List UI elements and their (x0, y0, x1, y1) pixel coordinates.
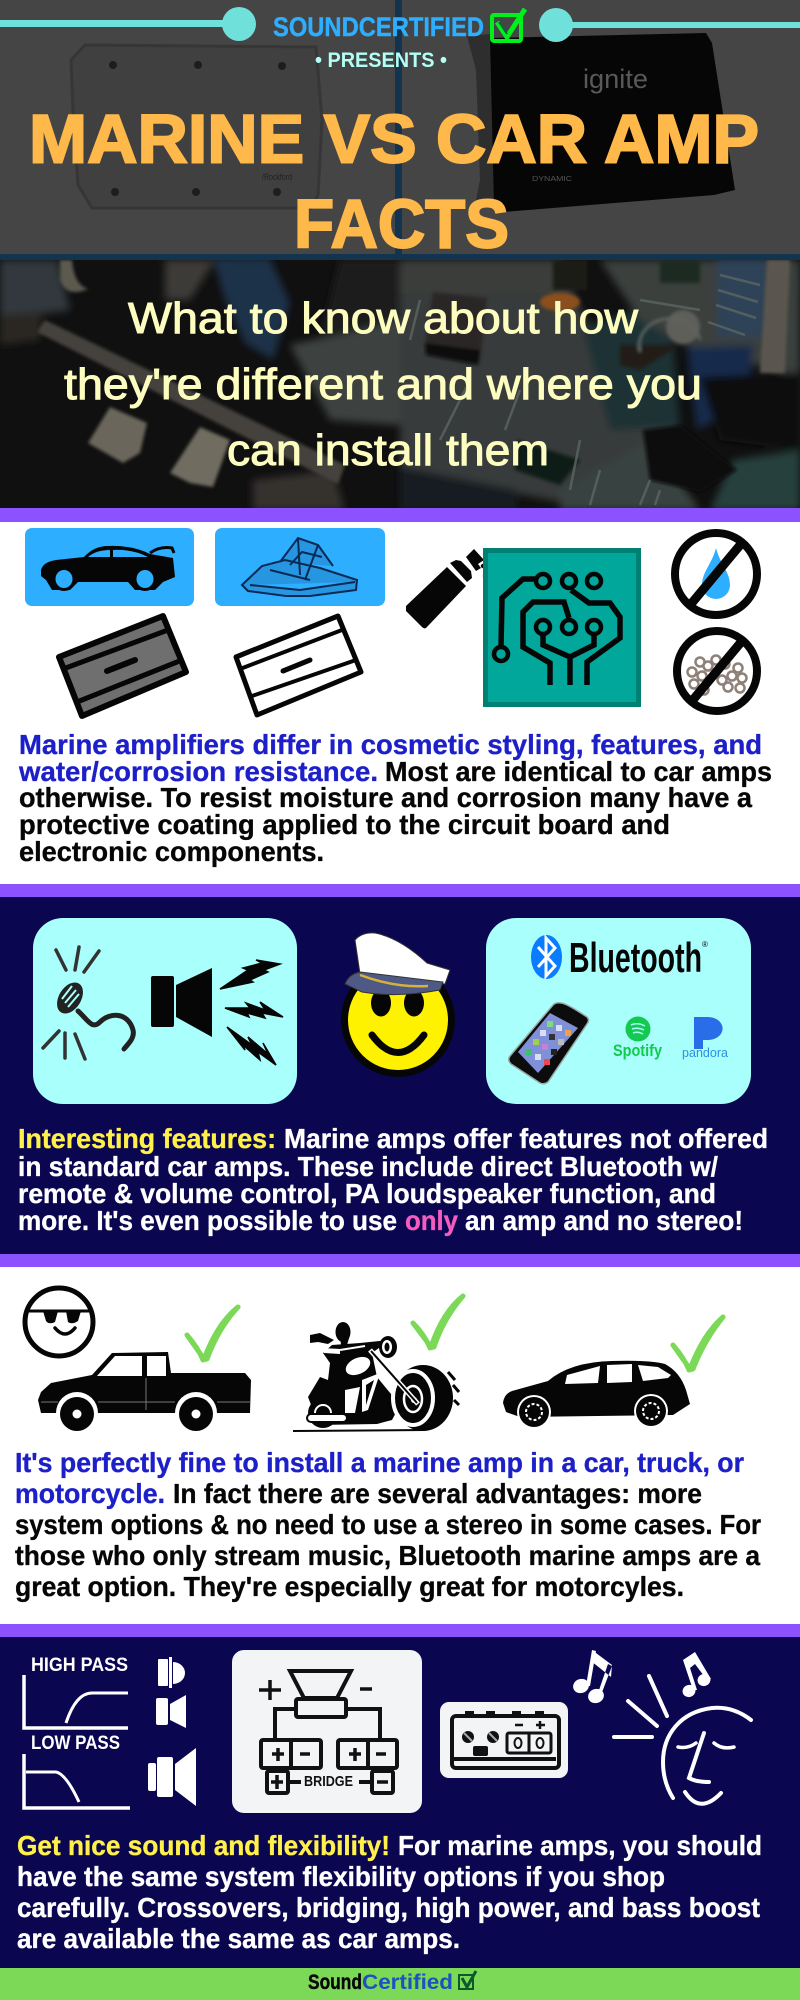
amp photo: black ignite amp (467, 33, 735, 212)
amp photo: marine amp: /Rockford (262, 172, 292, 182)
brand name: SOUNDCERTIFIED (273, 12, 484, 42)
logo: Pandora: pandora (682, 1045, 729, 1060)
tile: Bluetooth and streaming (486, 918, 751, 1104)
text block: marine differences (18, 729, 772, 867)
text block: marine differences: otherwise. To resist moisture and corrosion many have a (19, 782, 752, 813)
text block: install anywhere: those who only stream music, Bluetooth marine amps are a (15, 1540, 760, 1571)
icon: sound bolts (220, 960, 283, 1065)
text block: install anywhere: In fact there are several advantages: more (173, 1478, 702, 1509)
chart: low pass (24, 1733, 130, 1808)
panel: sound and flexibility (0, 1624, 800, 1968)
subtitle: What to know about how (128, 294, 638, 343)
text block: install anywhere: It's perfectly fine to install a marine amp in a car, truck, or (15, 1447, 744, 1478)
amp photo: black ignite amp: ignite (583, 64, 648, 94)
chart: high pass: HIGH PASS (31, 1655, 128, 1676)
icon: music notes and listener (571, 1650, 751, 1804)
text block: nice sound: have the same system flexibility options if you shop (17, 1861, 665, 1892)
icon: bluetooth logo (531, 934, 708, 981)
tile: PA loudspeaker (33, 918, 297, 1104)
amp photo: marine amp (71, 45, 322, 208)
title: FACTS (294, 186, 509, 262)
circuit board photo background (0, 258, 800, 510)
footer brand (308, 1971, 453, 1994)
logo line left (0, 7, 256, 41)
text block: marine differences: electronic components. (19, 836, 324, 867)
icon: spray can (406, 549, 512, 628)
tile: bridging diagram (232, 1650, 422, 1813)
subtitle (64, 294, 702, 475)
text block: nice sound: carefully. Crossovers, bridging, high power, and bass boost (17, 1892, 760, 1923)
text block: interesting features: Interesting features: (18, 1123, 276, 1154)
amp photo: black ignite amp: DYNAMIC (532, 176, 572, 183)
text block: interesting features: Marine amps offer features not offered (284, 1123, 768, 1154)
text block: nice sound: Get nice sound and flexibility! (17, 1830, 390, 1861)
text block: nice sound: are available the same as car amps. (17, 1923, 460, 1954)
icon: cool face (25, 1288, 93, 1356)
icon: no water (675, 533, 757, 615)
logo line right (539, 8, 800, 42)
logo: Pandora (682, 1017, 729, 1060)
footer brand: Certified (362, 1971, 453, 1994)
text block: nice sound: For marine amps, you should (398, 1830, 762, 1861)
text block: interesting features: more. It's even possible to use (18, 1205, 397, 1236)
white amp icon (236, 616, 361, 715)
icon: circuit board (486, 550, 638, 704)
logo: Spotify: Spotify (613, 1041, 662, 1060)
icon: midrange (156, 1695, 186, 1728)
tile: bridging diagram: BRIDGE (304, 1773, 353, 1790)
icon: woofer (148, 1748, 196, 1806)
panel: interesting features (0, 884, 800, 1254)
text block: interesting features (18, 1123, 768, 1236)
text block: marine differences: protective coating applied to the circuit board and (19, 809, 670, 840)
text block: nice sound (17, 1830, 762, 1954)
car tile (25, 528, 194, 606)
footer brand: Sound (308, 1971, 362, 1994)
check mark: truck (187, 1307, 238, 1360)
tile: amp power terminals (440, 1702, 568, 1778)
icon: wagon car (503, 1361, 690, 1429)
icon: speaker (151, 968, 212, 1037)
text block: interesting features: only (405, 1205, 458, 1236)
icon: motorcycle (293, 1322, 459, 1431)
check mark: wagon (673, 1317, 723, 1370)
grey amp icon (59, 616, 186, 716)
logo: Spotify (613, 1016, 662, 1060)
text block: interesting features: remote & volume control, PA loudspeaker function, and (18, 1178, 716, 1209)
chart: low pass: LOW PASS (31, 1733, 120, 1754)
icon: footer check box (459, 1971, 476, 1989)
text block: marine differences: Most are identical to car amps (385, 756, 772, 787)
text block: interesting features: in standard car amps. These include direct Bluetooth w/ (18, 1151, 718, 1182)
text block: marine differences: water/corrosion resistance. (18, 756, 378, 787)
text block: install anywhere: great option. They're especially great for motorcyles. (15, 1571, 684, 1602)
icon: pickup truck (38, 1352, 251, 1434)
icon: tweeter (158, 1657, 185, 1688)
header panel (0, 0, 800, 260)
text block: install anywhere (15, 1447, 761, 1602)
text block: marine differences: Marine amplifiers differ in cosmetic styling, features, and (19, 729, 762, 760)
panel: coating and corrosion (0, 508, 800, 884)
boat tile (215, 528, 385, 606)
chart: high pass (24, 1655, 128, 1728)
panel: where to install (0, 1254, 800, 1624)
icon: brand check box (492, 9, 525, 41)
icon: microphone (43, 947, 133, 1059)
subtitle: can install them (227, 426, 549, 475)
footer (0, 1968, 800, 2000)
icon: captain smiley (344, 933, 452, 1074)
check mark: motorcycle (413, 1296, 463, 1348)
icon: bluetooth logo: Bluetooth (569, 934, 702, 981)
text block: install anywhere: motorcycle. (15, 1478, 165, 1509)
presents label: • PRESENTS • (315, 49, 447, 72)
text block: interesting features: an amp and no stereo! (465, 1205, 743, 1236)
icon: phone (509, 1003, 588, 1084)
icon: no corrosion (677, 631, 757, 711)
subtitle: they're different and where you (64, 360, 702, 409)
title: MARINE VS CAR AMP (29, 100, 759, 178)
title (29, 100, 759, 262)
icon: bluetooth logo: ® (702, 940, 708, 949)
